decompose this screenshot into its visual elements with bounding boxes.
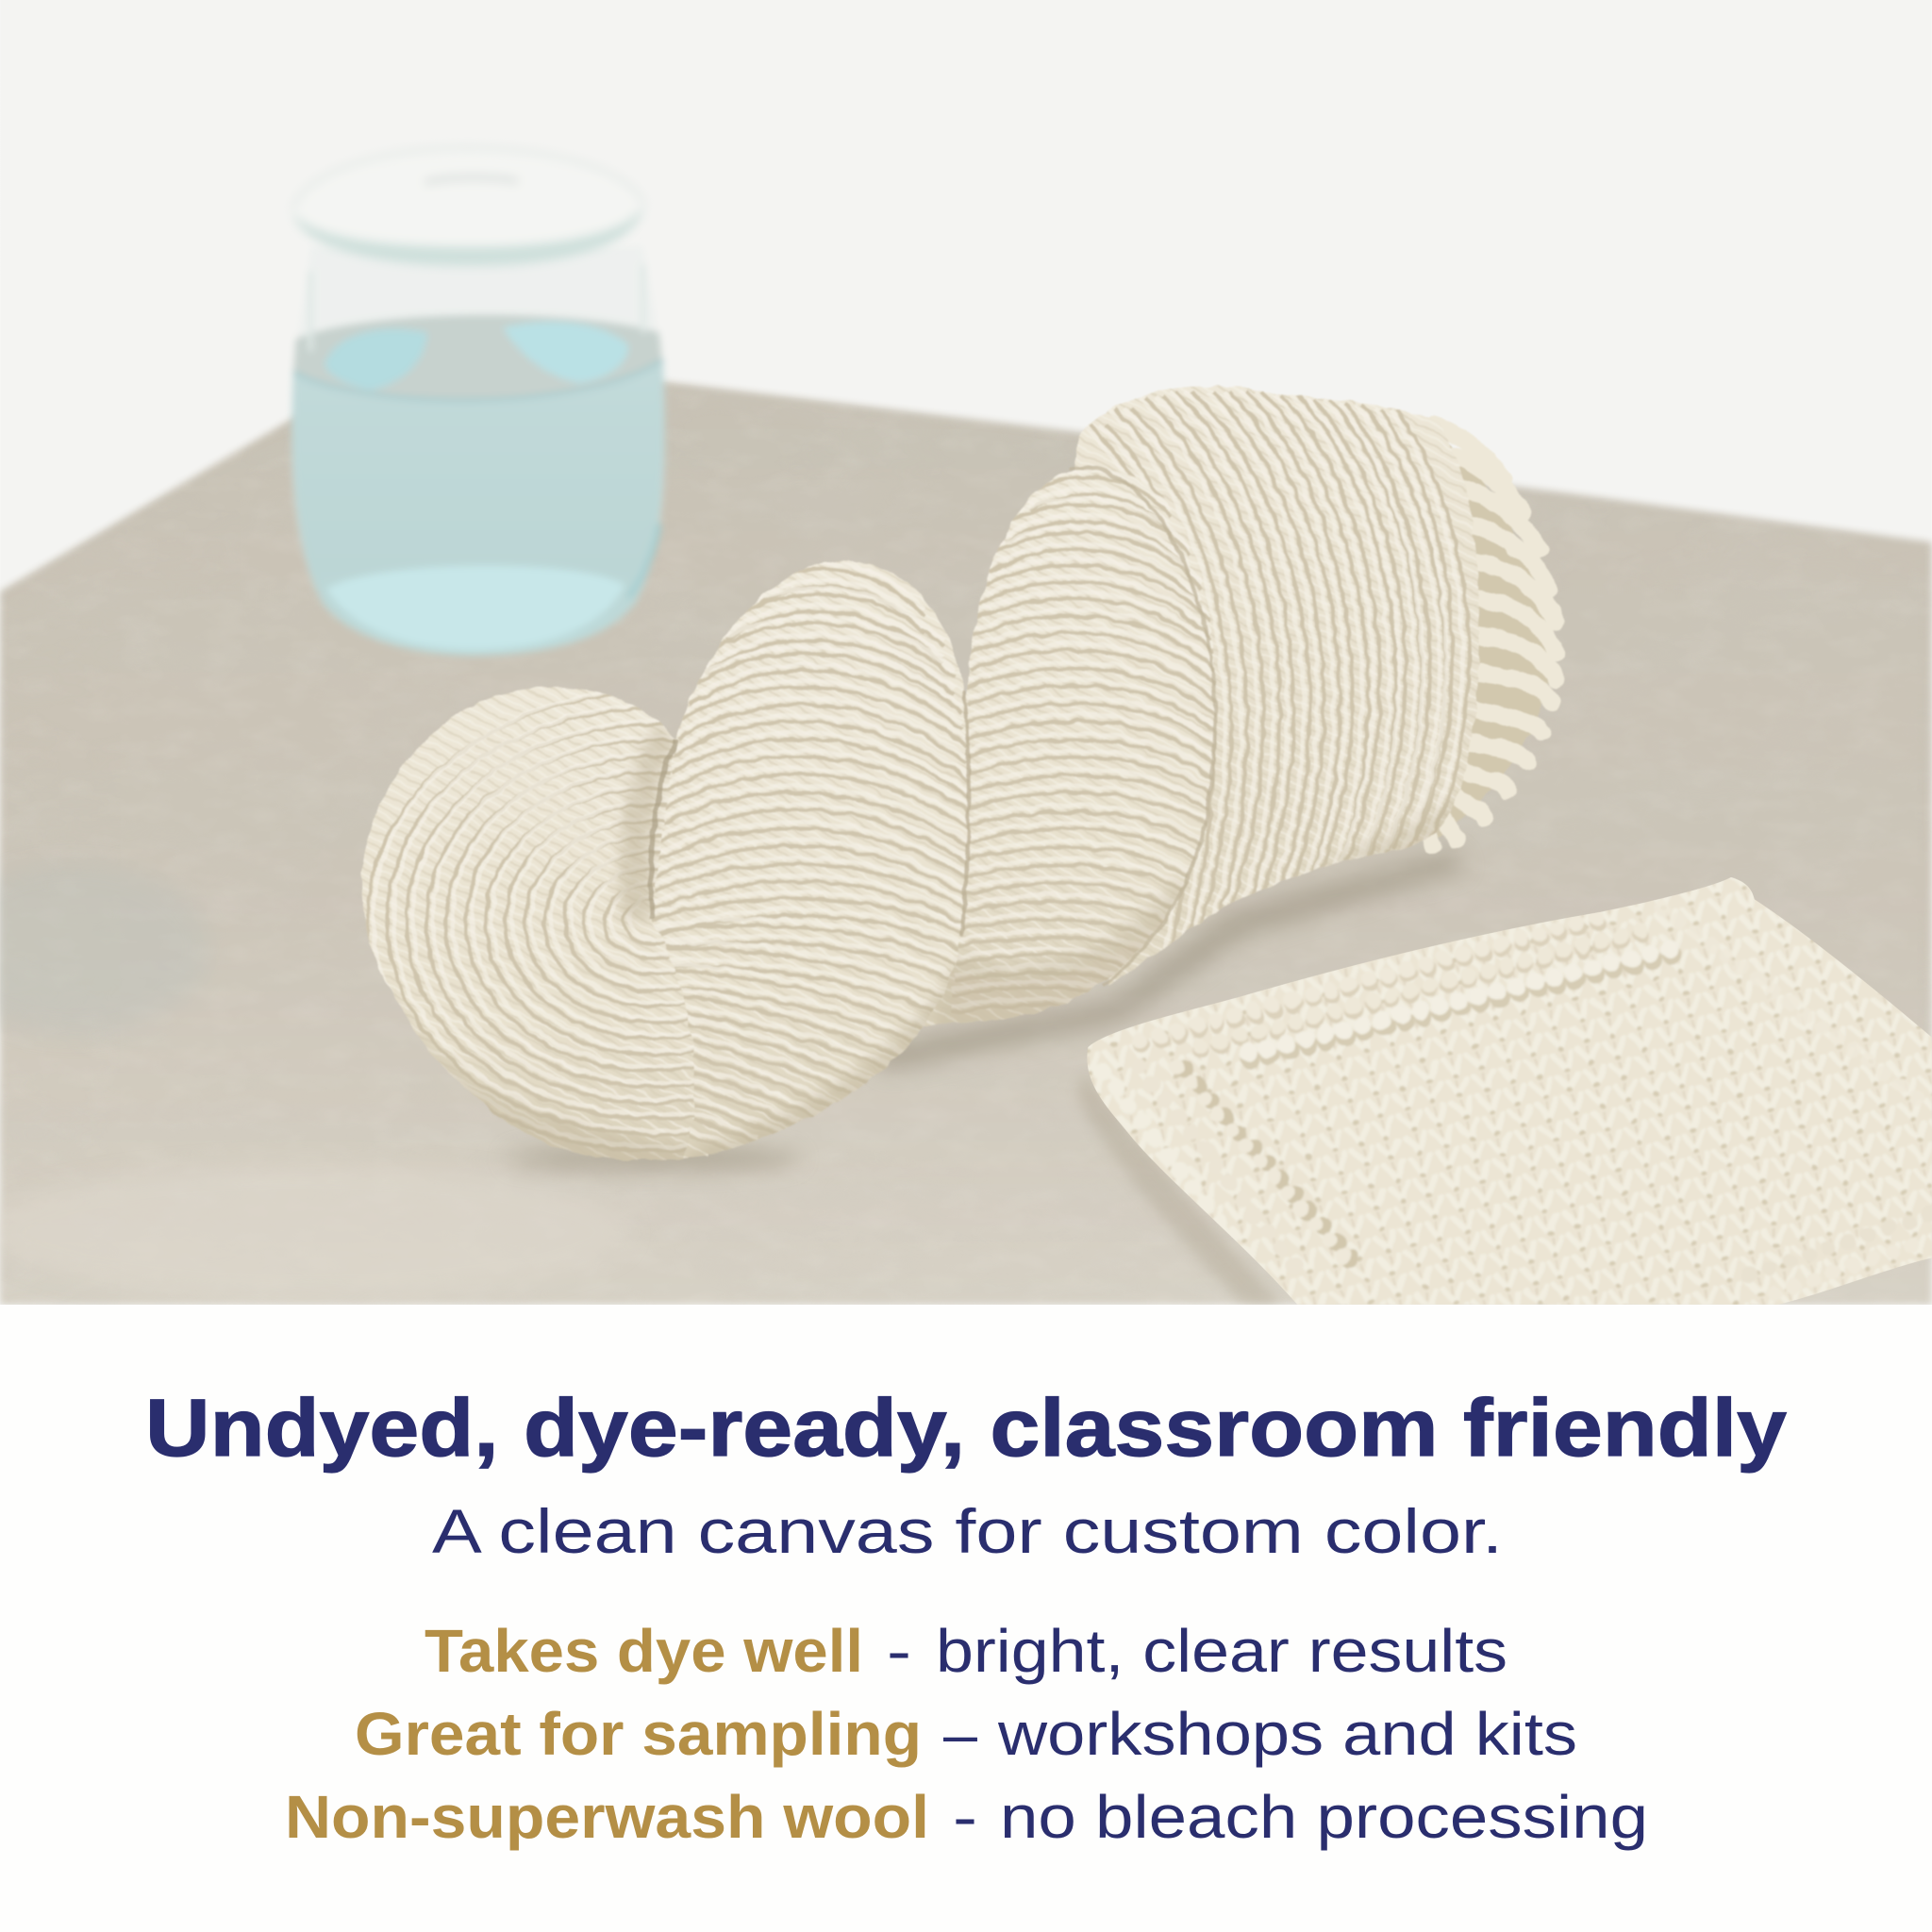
- stone table: [0, 378, 1932, 1305]
- crease: left notch: [651, 740, 675, 918]
- benefit: non-superwash wool: Non-superwash wool: [285, 1783, 929, 1851]
- benefit: non-superwash wool: -: [953, 1783, 977, 1851]
- yarn fan: right edge wraps: [1417, 425, 1557, 845]
- yarn skein: [351, 370, 1577, 1183]
- benefit: great for sampling: [355, 1700, 1577, 1768]
- panel: product photo: [0, 0, 1932, 1305]
- benefit: great for sampling: workshops and kits: [997, 1700, 1577, 1768]
- jar rim: [292, 148, 644, 266]
- swatch side border: [1103, 1067, 1932, 1293]
- benefit: great for sampling: –: [943, 1700, 977, 1768]
- benefit: non-superwash wool: no bleach processing: [1000, 1783, 1648, 1851]
- benefit: takes dye well: -: [887, 1617, 911, 1685]
- title: Undyed, dye-ready, classroom friendly: [145, 1383, 1787, 1474]
- glass jar with water: [291, 148, 665, 656]
- yarn lobe: middle: [924, 469, 1217, 1026]
- background wall: [0, 0, 1932, 1305]
- benefit: great for sampling: Great for sampling: [355, 1700, 922, 1768]
- yarn lobe: rear right: [1074, 385, 1480, 985]
- benefit: takes dye well: Takes dye well: [425, 1617, 863, 1685]
- yarn lobe: front centre: [651, 560, 969, 1158]
- crease: middle and rear lobes: [1070, 468, 1215, 986]
- subtitle: A clean canvas for custom color.: [432, 1496, 1503, 1566]
- crease: front and middle lobes: [961, 690, 969, 937]
- benefit: takes dye well: [425, 1617, 1507, 1685]
- panel: text block: [145, 1383, 1787, 1851]
- knitted swatch: [1072, 862, 1932, 1306]
- benefit: takes dye well: bright, clear results: [936, 1617, 1507, 1685]
- yarn contact shadows: [506, 850, 1466, 1171]
- swatch shadow: [1077, 1072, 1281, 1305]
- yarn lobe: outer left: [360, 686, 709, 1161]
- benefit: non-superwash wool: [285, 1783, 1648, 1851]
- swatch stitches: [1072, 862, 1932, 1306]
- swatch garter ridge: [1140, 909, 1932, 1108]
- jar body and water: [291, 246, 665, 656]
